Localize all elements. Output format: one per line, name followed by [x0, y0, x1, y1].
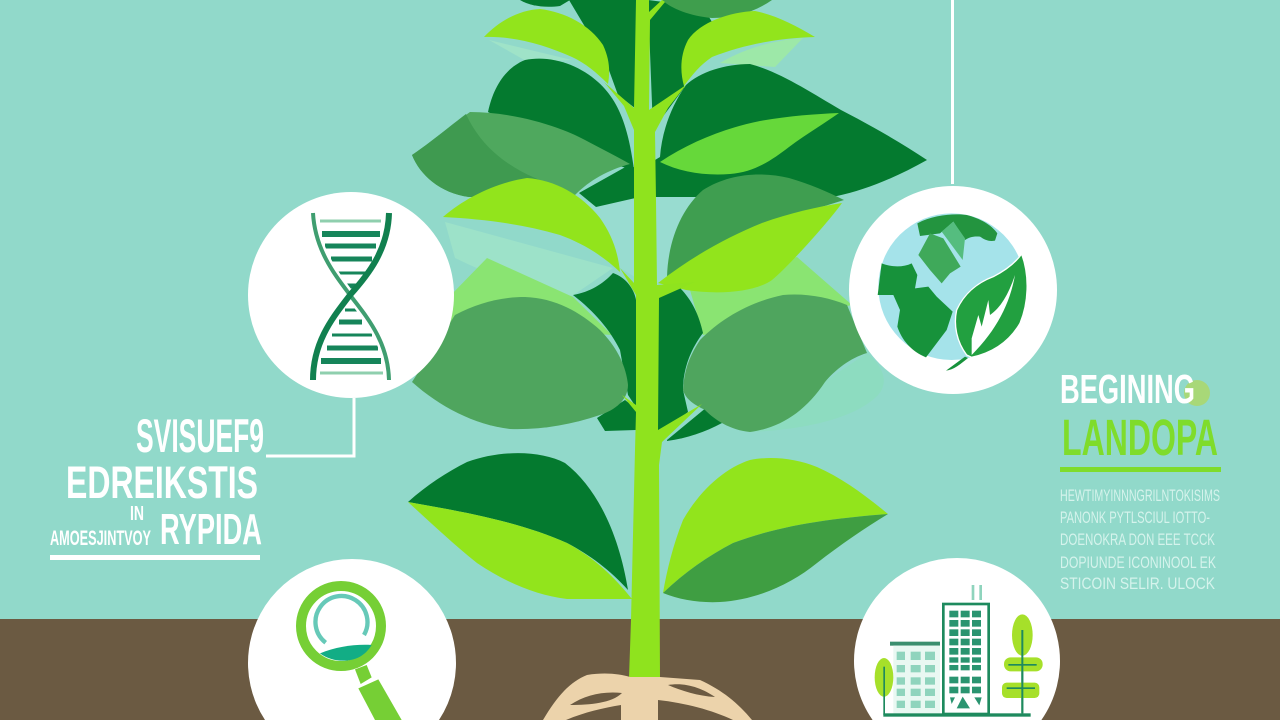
DNA dark strand [313, 213, 389, 380]
dark under left leaf [579, 165, 640, 207]
dark crown behind stem [520, 0, 712, 130]
text block: left heading: RYPIDA [160, 505, 262, 554]
low building [890, 642, 940, 714]
text block: right heading [1060, 366, 1221, 593]
handle neck [355, 665, 372, 684]
icon: DNA circle [248, 192, 454, 398]
right tall tree [1012, 614, 1033, 713]
middle dark leaves [573, 273, 722, 441]
leaf stalk [946, 357, 968, 371]
leaf vein [972, 275, 1015, 355]
globe artwork [878, 213, 1027, 371]
top left lime leaf [484, 9, 609, 84]
top right lime leaf [681, 11, 815, 86]
roots [543, 674, 752, 720]
connector line: top right [951, 0, 954, 184]
text block: left heading: SVISUEF9 [136, 409, 264, 462]
body copy [1060, 486, 1220, 593]
body copy: STICOIN SELIR. ULOCK [1060, 574, 1216, 593]
upper right dark leaf [655, 64, 927, 197]
chimneys [972, 585, 982, 600]
lime rule [1060, 467, 1221, 472]
west landmass [878, 263, 953, 357]
ground line [883, 713, 1031, 717]
text block: left heading [50, 409, 264, 560]
upper right bright leaf [660, 113, 839, 174]
leaf [955, 254, 1027, 357]
lower left dark leaf [408, 453, 628, 590]
light green back leaves [450, 257, 852, 335]
middle left green leaf [412, 297, 628, 429]
handle [358, 679, 402, 720]
middle landmass [918, 233, 961, 283]
right lime leaf [658, 203, 842, 292]
DNA rungs [320, 221, 383, 373]
icon: city buildings circle [854, 558, 1060, 720]
text block: left heading: EDREIKSTIS [66, 457, 258, 508]
tall building [943, 604, 989, 714]
right tiered bushes [1002, 657, 1043, 713]
right mid-green leaf [667, 174, 844, 277]
soil band [0, 619, 1280, 720]
heading white: BEGINING [1060, 366, 1195, 412]
north landmass [917, 214, 997, 241]
water [320, 645, 372, 661]
lower right green leaf [663, 514, 888, 602]
body copy: DOPIUNDE ICONINOOL EK [1060, 553, 1216, 572]
city artwork [875, 585, 1043, 717]
connector line: left [266, 398, 354, 456]
icon: globe with leaf circle [849, 186, 1057, 394]
middle right green leaf [683, 294, 867, 432]
teal landmass [942, 222, 965, 260]
text block: left heading: AMOESJINTVOY [50, 527, 151, 550]
left lime leaf [443, 178, 620, 272]
text block: left heading: IN [130, 503, 144, 525]
icon: magnifying glass circle [248, 559, 456, 720]
upper left mid-green leaf [412, 112, 630, 197]
magnifier artwork [301, 586, 402, 720]
upper left dark leaf [488, 59, 634, 170]
small badge [1184, 380, 1210, 406]
stem with branches [604, 0, 702, 678]
left tree [875, 658, 893, 715]
plant [408, 0, 927, 720]
DNA light strand [313, 213, 389, 380]
top mid-green leaf [662, 0, 772, 18]
teal arc [315, 596, 367, 643]
lower right lime leaf [663, 458, 888, 593]
pale background leaves [445, 38, 884, 432]
DNA light strand core [313, 213, 389, 380]
darker tone on left leaf [412, 114, 575, 197]
lower left lime leaf [408, 502, 632, 599]
